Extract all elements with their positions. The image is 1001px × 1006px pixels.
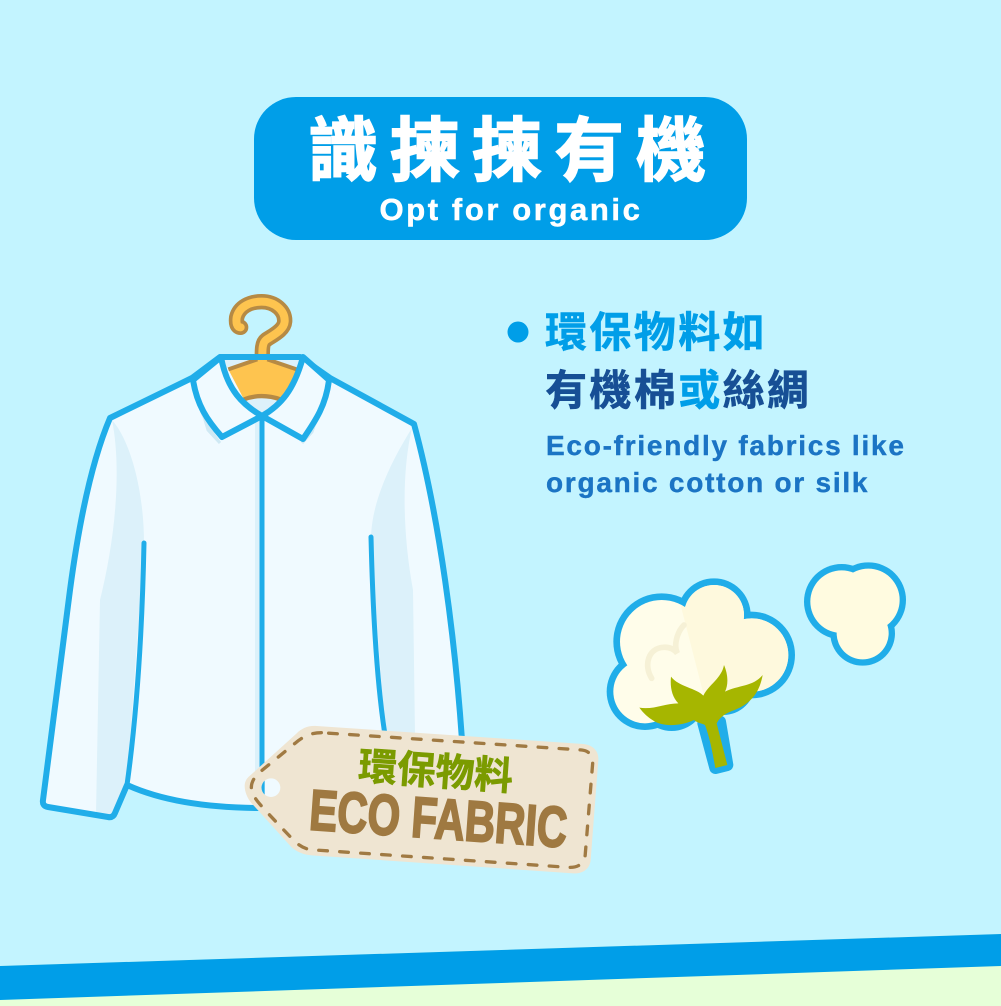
- sleeve seams: [127, 537, 385, 785]
- cotton leaves and stem: [639, 665, 763, 768]
- cotton illustration: [607, 562, 906, 768]
- cotton stem outline: [703, 722, 727, 768]
- main cotton boll: [607, 578, 795, 731]
- cotton fold lines: [648, 625, 684, 678]
- bullet heading: [545, 309, 811, 414]
- bullet English text: [546, 430, 906, 498]
- shirt illustration: [43, 302, 462, 817]
- tag body: [245, 726, 598, 873]
- hanger: [223, 302, 300, 417]
- collar shadow: [193, 380, 330, 443]
- tag English label: ECO FABRIC: [307, 778, 569, 860]
- title badge: [254, 97, 747, 240]
- eco fabric tag: [245, 726, 598, 873]
- cotton shaded lobe: [680, 585, 788, 694]
- bullet marker: [508, 322, 528, 342]
- bullet English text: Eco-friendly fabrics like: [546, 430, 906, 461]
- tag stitching: [251, 733, 593, 867]
- tag Chinese label: 環保物料: [357, 745, 514, 799]
- sleeve shading: [96, 420, 144, 817]
- footer band: [0, 934, 1001, 1006]
- bullet heading: 有機棉或絲綢: [545, 367, 811, 414]
- tag hole: [262, 778, 280, 797]
- placket: [260, 417, 264, 800]
- small cotton boll: [804, 562, 906, 666]
- title English: Opt for organic: [380, 192, 642, 227]
- title Chinese: 識揀揀有機: [308, 112, 718, 190]
- collar: [193, 357, 262, 437]
- bullet English text: organic cotton or silk: [546, 467, 869, 498]
- placket shading: [255, 417, 261, 807]
- shirt body: [43, 357, 462, 817]
- bullet heading: 環保物料如: [545, 309, 767, 356]
- shirt outline: [43, 357, 462, 817]
